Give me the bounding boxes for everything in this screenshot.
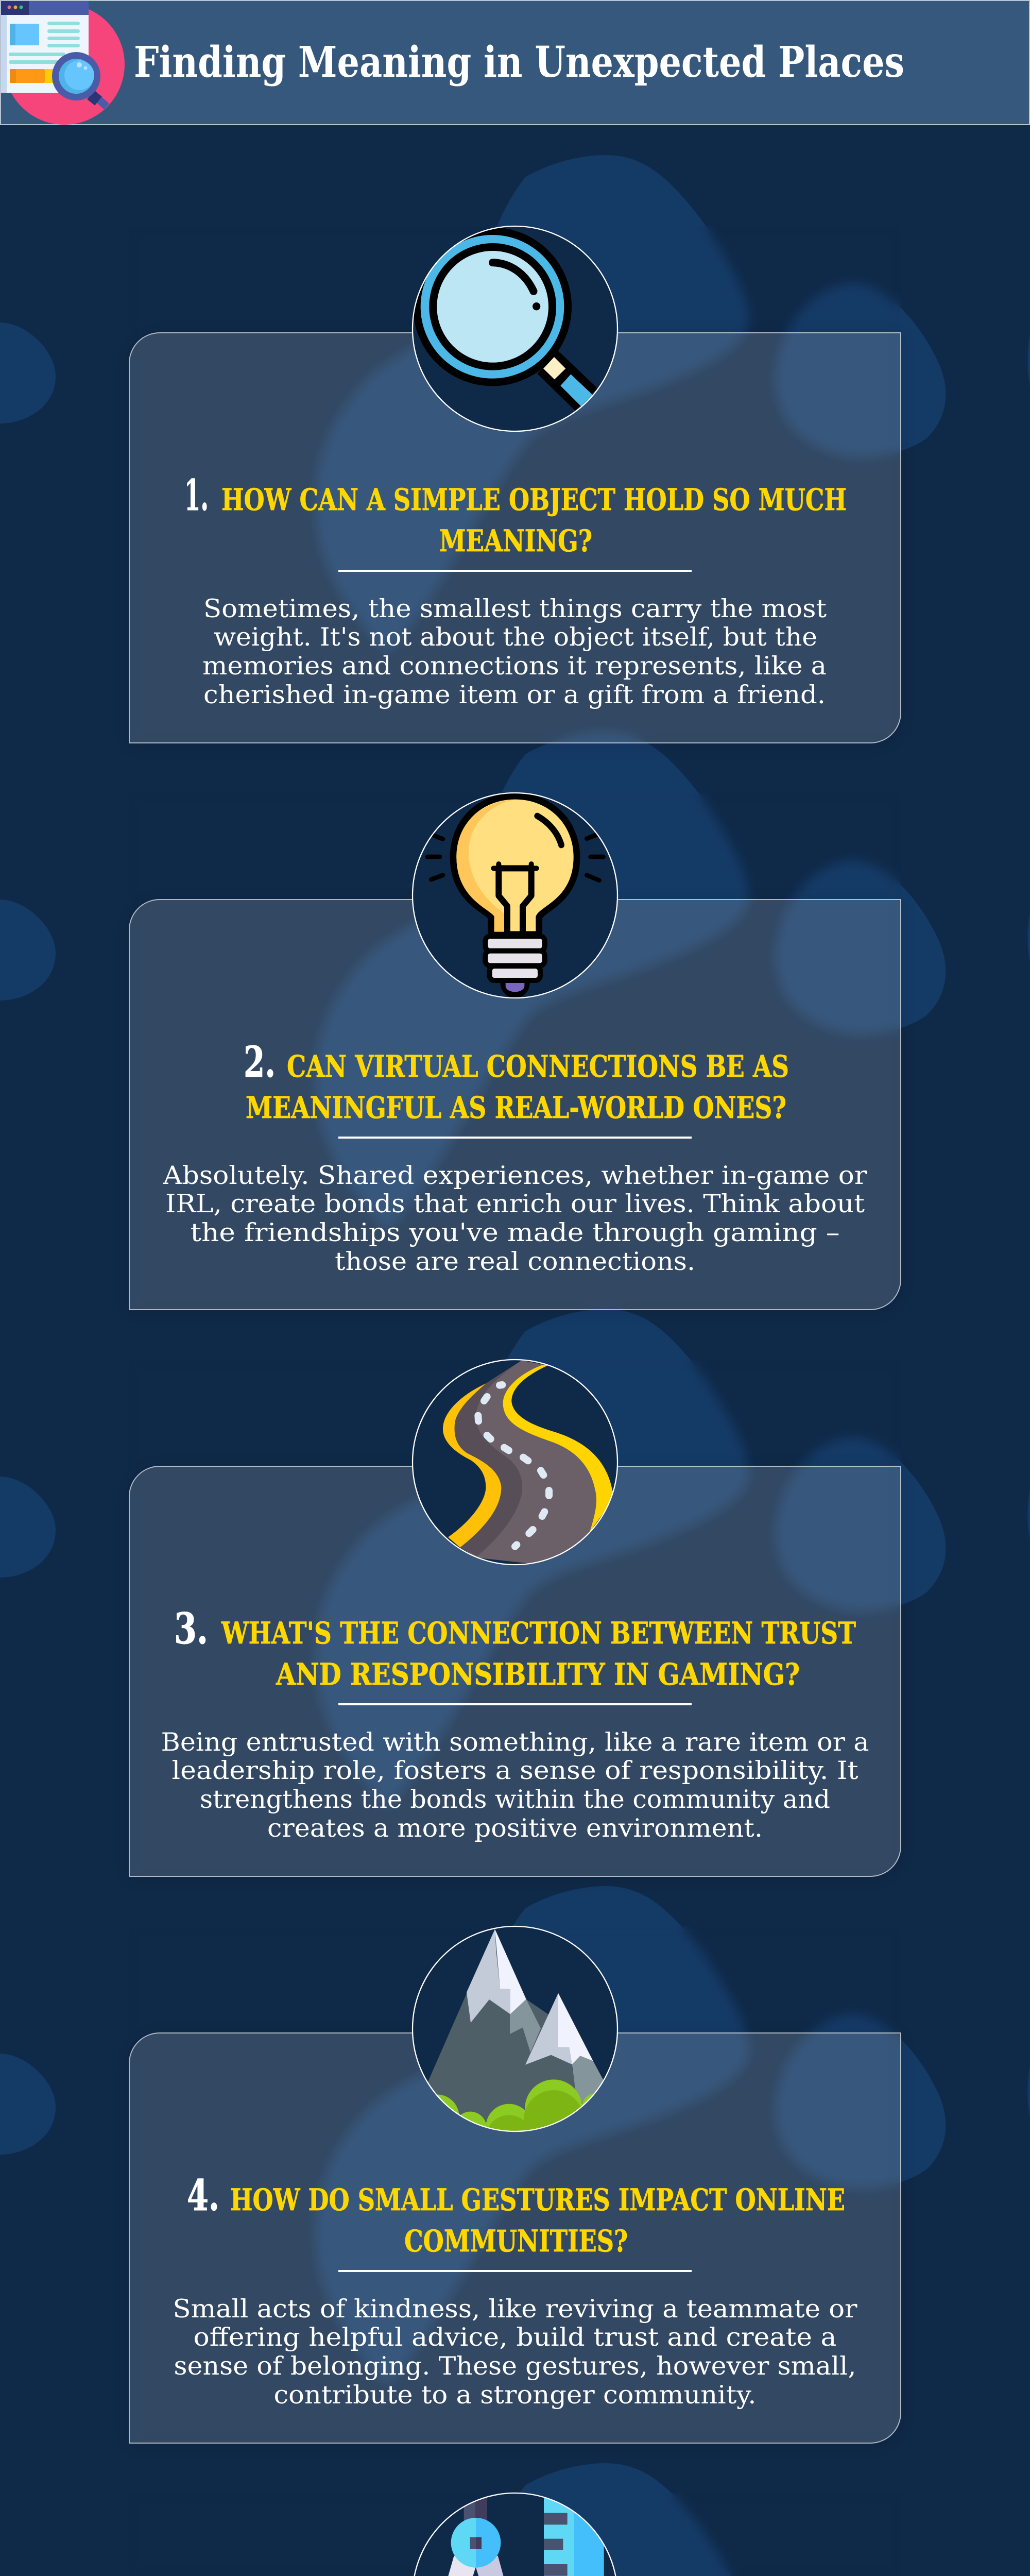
body text: Being entrusted with something, like a rare item or a <box>161 1727 869 1757</box>
panel: question 1 <box>129 226 901 743</box>
body text: leadership role, fosters a sense of responsibility. It <box>172 1756 859 1785</box>
heading <box>244 1038 789 1125</box>
heading: AND RESPONSIBILITY IN GAMING? <box>276 1657 800 1692</box>
body text <box>202 594 827 709</box>
panel: question 2 <box>129 792 901 1310</box>
body text: cherished in-game item or a gift from a friend. <box>203 680 826 709</box>
body text: the friendships you've made through gaming – <box>191 1218 839 1247</box>
body text: Absolutely. Shared experiences, whether in-game or <box>162 1161 867 1190</box>
icon: document with magnifier <box>1 1 125 125</box>
heading: MEANINGFUL AS REAL-WORLD ONES? <box>246 1090 786 1125</box>
heading <box>187 2171 845 2259</box>
question 3 text <box>161 1604 869 1843</box>
icon: magnifying glass <box>129 226 618 432</box>
icon: mountains <box>129 1926 618 2132</box>
heading: MEANING? <box>439 523 592 558</box>
body text: creates a more positive environment. <box>267 1814 763 1843</box>
heading: 4. <box>187 2171 219 2221</box>
heading: COMMUNITIES? <box>404 2224 628 2259</box>
icon: winding road <box>129 1359 618 1565</box>
header banner <box>0 0 1030 125</box>
body text <box>161 1727 869 1843</box>
body text <box>173 2294 857 2410</box>
question 2 text <box>162 1038 867 1276</box>
body text: Small acts of kindness, like reviving a teammate or <box>173 2294 857 2324</box>
icon: compass and ruler <box>414 2493 616 2576</box>
panel: question 5 <box>414 2493 731 2576</box>
heading: HOW DO SMALL GESTURES IMPACT ONLINE <box>230 2182 845 2217</box>
heading <box>184 471 847 558</box>
body text: IRL, create bonds that enrich our lives. Think about <box>165 1189 865 1218</box>
body text: weight. It's not about the object itself, but the <box>214 622 817 652</box>
heading: 2. <box>244 1038 276 1087</box>
heading: 1. <box>184 471 209 520</box>
body text: offering helpful advice, build trust and create a <box>194 2323 836 2352</box>
body text: contribute to a stronger community. <box>274 2380 756 2410</box>
card background <box>129 332 901 743</box>
body text: Sometimes, the smallest things carry the most <box>203 594 827 623</box>
panel: question 4 <box>129 1926 901 2444</box>
body text: those are real connections. <box>335 1247 695 1276</box>
card background <box>129 2032 901 2444</box>
card background <box>129 1466 901 1877</box>
question 4 text <box>173 2171 857 2410</box>
card background <box>129 899 901 1310</box>
body text: strengthens the bonds within the community and <box>200 1785 830 1814</box>
body text <box>162 1161 867 1276</box>
panel: question 3 <box>129 1359 901 1877</box>
question 1 text <box>184 471 847 709</box>
icon: light bulb <box>129 792 618 998</box>
heading <box>174 1604 856 1692</box>
heading: WHAT'S THE CONNECTION BETWEEN TRUST <box>221 1616 856 1651</box>
question 5 text <box>129 2493 901 2576</box>
body text: sense of belonging. These gestures, however small, <box>174 2351 856 2381</box>
heading: 3. <box>174 1604 208 1654</box>
body text: memories and connections it represents, like a <box>202 651 827 681</box>
heading: CAN VIRTUAL CONNECTIONS BE AS <box>287 1049 789 1084</box>
heading: HOW CAN A SIMPLE OBJECT HOLD SO MUCH <box>221 482 847 517</box>
